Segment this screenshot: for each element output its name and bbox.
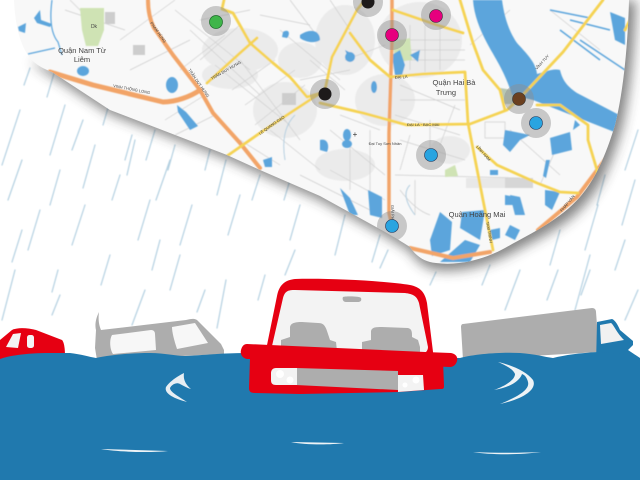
map: place and road labels: VĨNH TUY	[534, 53, 550, 71]
side mirror bar	[241, 344, 457, 367]
map marker: blue centre	[424, 148, 438, 162]
left seat	[281, 322, 337, 351]
map: place and road labels: Dk	[91, 24, 98, 30]
car: main red, flooded	[241, 279, 457, 394]
map: place and road labels: TRẦN DUY HƯNG	[210, 60, 242, 81]
panel: city map	[0, 0, 640, 280]
map: place and road labels: TAM TRINH	[485, 221, 494, 243]
map: place and road labels: +	[353, 130, 358, 139]
truck: grey with blue cab	[461, 308, 640, 365]
map: place and road labels: Đại Tuy Sơn Nhân	[369, 141, 401, 146]
windscreen	[272, 290, 428, 354]
map marker: blue south	[386, 220, 398, 232]
map: minor streets	[65, 0, 600, 215]
map marker: brown	[512, 92, 526, 106]
map: marker halos	[201, 0, 551, 241]
map: place and road labels: Trưng	[436, 88, 456, 97]
map: yellow roads	[207, 0, 630, 250]
map: place and road labels	[58, 21, 576, 243]
front body	[249, 358, 444, 394]
rear-view mirror	[343, 296, 361, 302]
map: place and road labels: Liêm	[74, 55, 90, 64]
map: place and road labels: Quận Hai Bà	[433, 78, 476, 87]
map: place and road labels: VINH THÔNG LONG	[113, 83, 151, 95]
water	[0, 352, 640, 480]
map: place and road labels: GIẢI PHÓNG	[390, 205, 396, 229]
map: canals	[0, 0, 625, 215]
map marker: pink left	[386, 28, 398, 42]
map: place and road labels: LÊ QUANG ĐẠO	[258, 114, 286, 136]
map: place and road labels: PHÁP VÂN	[559, 194, 576, 213]
wave: ripple right	[473, 452, 541, 454]
map marker: pink right	[430, 10, 442, 22]
map shadow	[30, 0, 636, 271]
map: place and road labels: ĐẠI LA · BẠC MAI	[407, 122, 439, 127]
map: place and road labels: LĨNH NAM	[475, 144, 492, 162]
map: lakes and ponds	[18, 10, 625, 262]
map: parks	[80, 8, 525, 177]
grille	[296, 368, 398, 390]
map: orange highways	[50, 0, 607, 258]
map: place and road labels: Quận Nam Từ	[58, 46, 106, 55]
map: place and road labels: ĐẠI LA	[395, 74, 408, 80]
map marker: black centre	[318, 88, 332, 100]
map: river	[473, 0, 625, 133]
map marker: green	[210, 16, 222, 28]
car roof and pillars	[266, 279, 434, 360]
wave: ripple centre	[291, 442, 344, 444]
right seat	[362, 327, 420, 354]
left headlight	[271, 368, 297, 385]
map: place and road labels: TRẦN DUY HƯNG	[187, 68, 211, 98]
map: built-up areas	[105, 2, 533, 188]
wave: left swirl	[166, 373, 191, 402]
wave: right swirl	[494, 362, 534, 404]
rain streaks	[2, 68, 638, 328]
car: grey sedan	[95, 312, 224, 360]
map marker: blue east	[530, 116, 542, 130]
map: place and road labels: PHẠM HÙNG	[149, 21, 167, 44]
right headlight	[398, 375, 424, 392]
car: small red, left	[0, 328, 65, 360]
map: place and road labels: Quận Hoàng Mai	[449, 210, 506, 219]
wave: ripple left	[101, 449, 168, 452]
map marker: black top	[362, 0, 374, 8]
